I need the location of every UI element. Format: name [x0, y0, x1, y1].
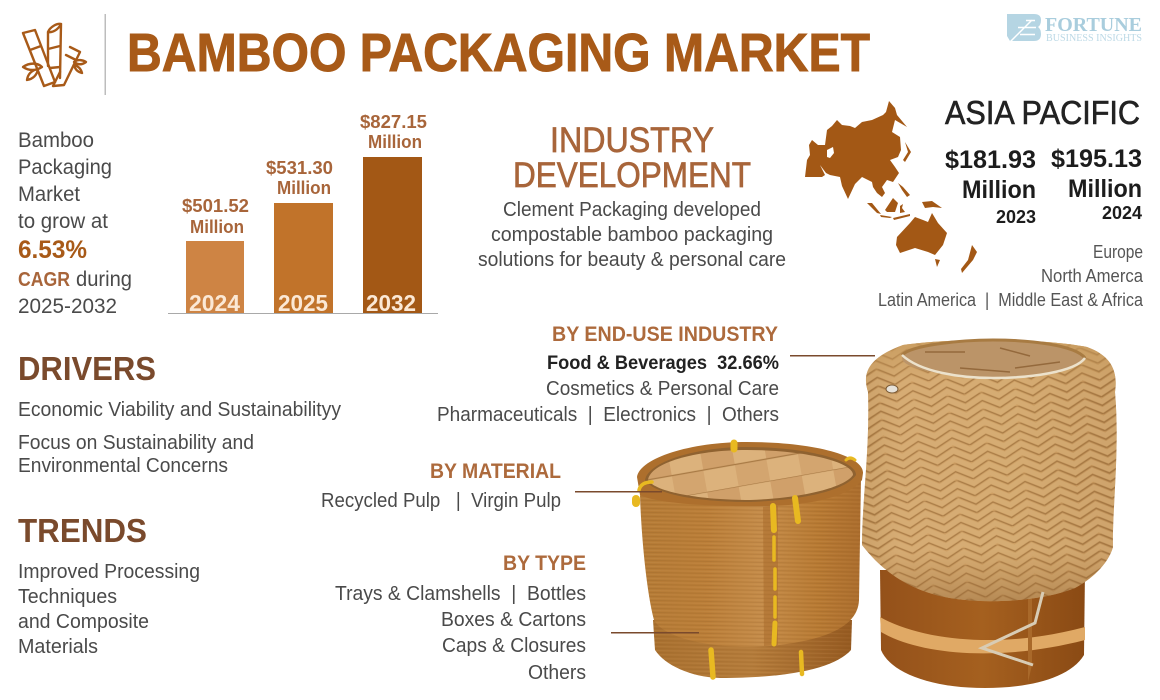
text block: drivers: Focus on Sustainability and: [18, 432, 254, 454]
bar chart: $531.30: [266, 158, 333, 178]
text block: drivers: Environmental Concerns: [18, 455, 228, 477]
heading: drivers: DRIVERS: [18, 350, 156, 387]
segment: by type: [335, 552, 586, 684]
text block: market growth: 2025-2032: [18, 295, 117, 318]
heading: industry development: DEVELOPMENT: [513, 156, 751, 195]
segment: by end-use industry: [437, 323, 779, 426]
segment: by end-use industry: BY END-USE INDUSTRY: [552, 323, 778, 346]
bar chart: $827.15: [360, 112, 427, 132]
text block: trends: and Composite: [18, 611, 149, 633]
text block: market growth: 6.53%: [18, 236, 87, 264]
illustration: right woven basket: [862, 339, 1117, 688]
heading: Asia Pacific: ASIA PACIFIC: [945, 94, 1140, 131]
map: Asia Pacific: [805, 101, 977, 273]
text block: trends: Techniques: [18, 586, 117, 608]
text block: industry development: compostable bamboo packaging: [491, 224, 773, 246]
icon: bamboo: [23, 24, 86, 86]
bar chart: Million: [277, 178, 331, 198]
text block: market growth: Packaging: [18, 156, 112, 179]
bar chart: [168, 112, 438, 316]
values: 2023: Million: [962, 176, 1036, 204]
illustration: left bamboo basket: [636, 442, 863, 678]
logo: Fortune Business Insights: [1007, 14, 1142, 44]
heading: trends: TRENDS: [18, 512, 147, 549]
values: 2024: Million: [1068, 175, 1142, 203]
segment: by type: Others: [528, 662, 586, 684]
segment: by end-use industry: Pharmaceuticals | Electronics | Others: [437, 404, 779, 426]
text block: market growth: Market: [18, 183, 80, 206]
bar chart: 2024: [189, 290, 240, 316]
values: 2023: 2023: [996, 207, 1036, 227]
bar 2024: [186, 241, 244, 313]
values: 2023: [945, 146, 1036, 227]
segment: by type: Caps & Closures: [442, 635, 586, 657]
divider line: [104, 14, 106, 95]
segment: by end-use industry: Cosmetics & Personal Care: [546, 378, 779, 400]
bar 2032: [363, 157, 422, 313]
text block: trends: Materials: [18, 636, 98, 658]
text block: trends: [18, 561, 200, 658]
text block: trends: Improved Processing: [18, 561, 200, 583]
values: 2023: $181.93: [945, 146, 1036, 174]
segment: by end-use industry: Food & Beverages 32.66%: [547, 353, 779, 374]
leader line: end-use industry: [790, 355, 875, 356]
text block: industry development: [478, 199, 786, 271]
values: 2024: $195.13: [1051, 145, 1142, 173]
text block: market growth: during: [76, 268, 132, 291]
leader line: material: [575, 491, 662, 492]
title: BAMBOO PACKAGING MARKET: [127, 23, 870, 83]
segment: by type: BY TYPE: [503, 552, 586, 575]
text block: market growth: [18, 129, 132, 318]
bar chart: 2032: [366, 290, 416, 316]
text block: other regions: Europe: [1093, 242, 1143, 262]
text block: other regions: [878, 242, 1144, 310]
text block: other regions: North Amerca: [1041, 266, 1144, 286]
heading: industry development: [513, 121, 751, 195]
bar chart: Million: [190, 217, 244, 237]
text block: market growth: to grow at: [18, 210, 108, 233]
logo: Fortune Business Insights: FORTUNE: [1045, 14, 1142, 36]
bar 2025: [274, 203, 333, 313]
logo: Fortune Business Insights: BUSINESS INSIGHTS: [1046, 33, 1142, 44]
leader line: type: [611, 632, 699, 634]
text block: market growth: Bamboo: [18, 129, 94, 152]
heading: industry development: INDUSTRY: [550, 121, 714, 160]
segment: by material: [321, 460, 561, 512]
text block: drivers: Economic Viability and Sustainabilityy: [18, 399, 341, 421]
text block: industry development: solutions for beauty & personal care: [478, 249, 786, 271]
bar chart: Million: [368, 132, 422, 152]
segment: by type: Trays & Clamshells | Bottles: [335, 583, 586, 605]
text block: industry development: Clement Packaging developed: [503, 199, 761, 221]
values: 2024: [1051, 145, 1142, 223]
text block: drivers: [18, 399, 341, 477]
text block: market growth: CAGR: [18, 269, 70, 291]
yellow stitches: [636, 443, 855, 677]
bar chart: $501.52: [182, 196, 249, 216]
values: 2024: 2024: [1102, 203, 1142, 223]
segment: by type: Boxes & Cartons: [441, 609, 586, 631]
segment: by material: Recycled Pulp | Virgin Pulp: [321, 490, 561, 512]
Australia: [896, 213, 947, 255]
segment: by material: BY MATERIAL: [430, 460, 561, 483]
bar chart: 2025: [278, 290, 328, 316]
